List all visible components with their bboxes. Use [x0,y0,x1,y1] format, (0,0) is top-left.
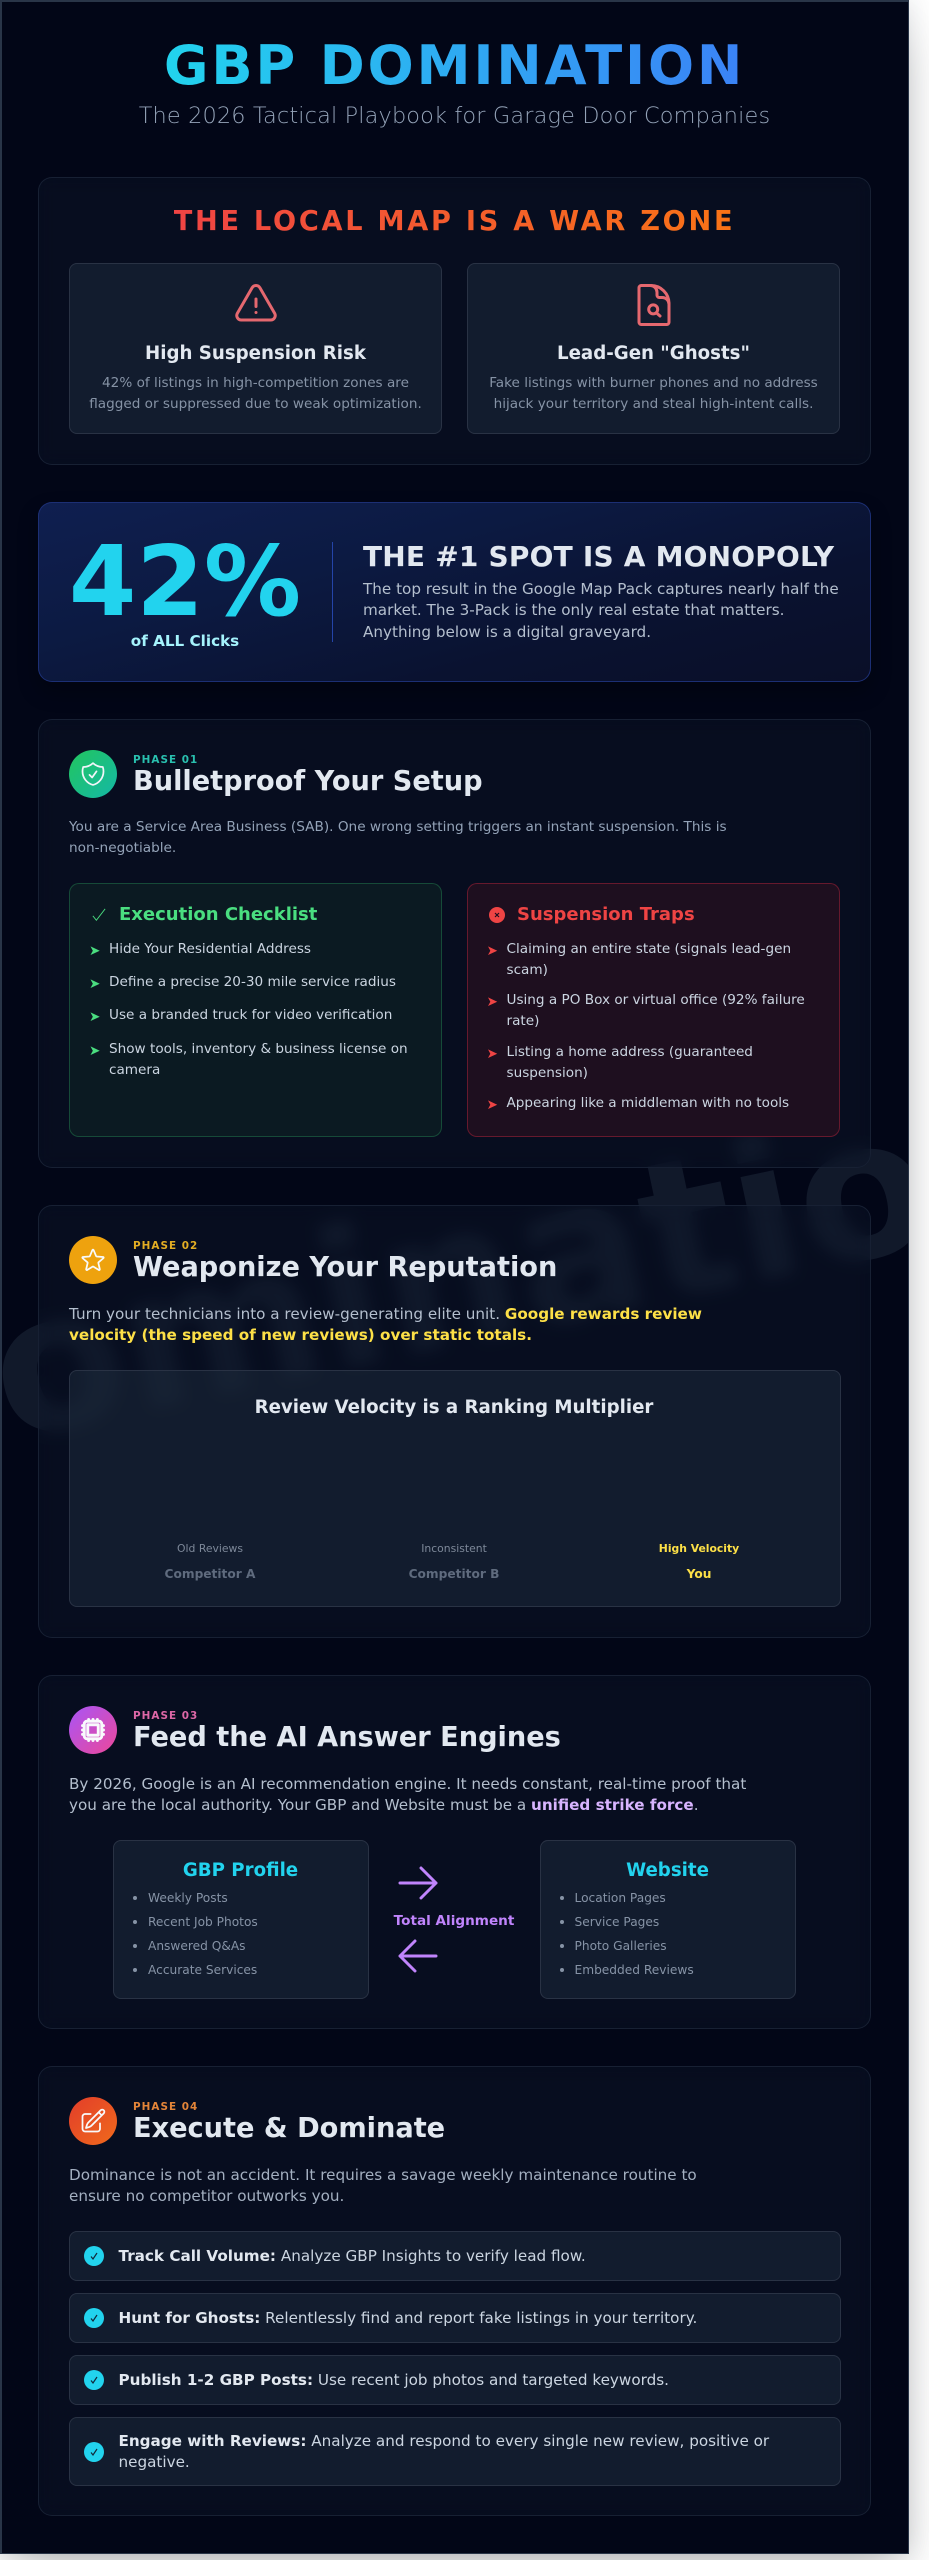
card text: flagged or suppressed due to weak optimization. [89,396,422,412]
task text: Track Call Volume: Analyze GBP Insights to verify lead flow. [118,2247,586,2265]
trap item: Listing a home address (guaranteed [506,1044,753,1060]
checklist item [89,1041,408,1078]
trap item: scam) [506,962,548,978]
chart label: competitor b: Inconsistent [421,1542,487,1555]
trap item [486,1044,753,1081]
monopoly text [362,580,839,641]
chart label: you [659,1542,739,1581]
arrow: right [398,1866,438,1900]
box: gbp profile [113,1840,369,1999]
icon: document search [638,284,670,326]
phase text [69,819,727,856]
task text: Hunt for Ghosts: Relentlessly find and report fake listings in your territory. [118,2309,697,2327]
phase title: Feed the AI Answer Engines [133,1722,561,1753]
icon: check circle [84,2370,104,2390]
panel: phase 03 [38,1675,871,2029]
header [139,34,770,129]
chart label: competitor b: Competitor B [409,1567,499,1581]
phase text: velocity (the speed of new reviews) over static totals. [69,1326,532,1344]
phase text: Dominance is not an accident. It requires a savage weekly maintenance routine to [69,2166,697,2184]
phase text: You are a Service Area Business (SAB). One wrong setting triggers an instant suspension. This is [69,819,727,835]
card: suspension traps: ➤ [486,1046,498,1062]
card text: Fake listings with burner phones and no address [489,375,818,391]
chart label: competitor a: Old Reviews [177,1542,243,1555]
phase label: PHASE 01 [133,754,198,766]
card: execution checklist [69,883,442,1137]
list item: Photo Galleries [574,1939,667,1953]
card: execution checklist: ➤ [89,943,100,959]
task: track call volume [69,2231,841,2281]
checklist item: Show tools, inventory & business license on [109,1041,408,1057]
monopoly text: Anything below is a digital graveyard. [363,623,651,641]
icon: check circle [84,2308,104,2328]
chart label: you: High Velocity [659,1542,739,1555]
icon: pencil square [69,2097,117,2145]
icon: warning triangle [235,284,277,322]
list item: Embedded Reviews [574,1963,694,1977]
icon: star [69,1236,117,1284]
list item: Weekly Posts [148,1891,228,1905]
trap item [486,992,805,1029]
stat: 42%: 42% [69,525,301,638]
phase text: you are the local authority. Your GBP and Website must be a unified strike force. [69,1796,699,1814]
monopoly text: market. The 3-Pack is the only real estate that matters. [363,601,784,619]
chart label: competitor a: Competitor A [165,1567,255,1581]
stat label: of ALL Clicks [131,632,239,650]
card text [89,375,422,412]
card: high suspension risk [69,263,442,434]
task text: Publish 1-2 GBP Posts: Use recent job photos and targeted keywords. [118,2371,669,2389]
title: GBP DOMINATION [164,34,745,97]
phase text [69,1775,746,1814]
trap item: Using a PO Box or virtual office (92% failure [506,992,805,1008]
card text: 42% of listings in high-competition zones are [102,375,409,391]
card: suspension traps: ➤ [486,943,498,959]
task: engage with reviews [69,2417,841,2486]
checklist item: Use a branded truck for video verification [109,1007,392,1023]
trap item: rate) [506,1013,539,1029]
task text: negative. [118,2453,190,2471]
card: execution checklist: ➤ [89,976,100,992]
monopoly text: The top result in the Google Map Pack captures nearly half the [363,580,839,598]
icon: x circle [489,907,505,923]
card title: High Suspension Risk [145,343,366,364]
arrow: left [398,1939,438,1973]
card: lead-gen ghosts [467,263,840,434]
list item: Accurate Services [148,1963,257,1977]
panel: phase 01 [38,719,871,1168]
trap item [486,941,791,978]
list item: Answered Q&As [148,1939,246,1953]
phase text [68,1305,702,1344]
heading: war zone: THE LOCAL MAP IS A WAR ZONE [174,206,735,237]
phase label: PHASE 02 [133,1240,198,1252]
phase text: By 2026, Google is an AI recommendation engine. It needs constant, real-time proof that [69,1775,746,1793]
card text: hijack your territory and steal high-intent calls. [494,396,813,412]
card: execution checklist: ➤ [89,1009,100,1025]
checklist item: Define a precise 20-30 mile service radius [109,974,396,990]
box: website [540,1840,796,1999]
trap item: Appearing like a middleman with no tools [506,1095,789,1111]
phase title: Weaponize Your Reputation [133,1252,557,1283]
chart: review velocity [69,1370,841,1607]
icon: check circle [84,2442,104,2462]
list item: Recent Job Photos [148,1915,258,1929]
icon: cpu chip [69,1706,117,1754]
phase text: Turn your technicians into a review-generating elite unit. Google rewards review [69,1305,702,1323]
list item: Service Pages [574,1915,659,1929]
panel: 42 percent stat [38,502,871,682]
phase text: non-negotiable. [69,840,176,856]
traps title: Suspension Traps [517,904,695,925]
card: suspension traps: ➤ [486,994,498,1010]
chart label: competitor a [165,1542,256,1581]
label: total alignment: Total Alignment [394,1913,514,1929]
card title: Lead-Gen "Ghosts" [557,343,750,364]
panel: phase 02 [38,1205,871,1638]
card: suspension traps [467,883,840,1137]
subtitle: The 2026 Tactical Playbook for Garage Door Companies [139,103,770,129]
phase title: Execute & Dominate [133,2113,445,2144]
chart label: competitor b [409,1542,499,1581]
card text [489,375,818,412]
divider [332,542,333,642]
panel: the local map is a war zone [38,177,871,465]
phase text [69,2166,697,2205]
task text: Engage with Reviews: Analyze and respond to every single new review, positive or [118,2432,769,2450]
heading: monopoly: THE #1 SPOT IS A MONOPOLY [363,540,834,573]
trap item: Claiming an entire state (signals lead-gen [506,941,791,957]
checklist item: camera [109,1062,160,1078]
checklist item: Hide Your Residential Address [109,941,311,957]
card: execution checklist: ➤ [89,1043,100,1059]
phase label: PHASE 03 [133,1710,198,1722]
icon: check [92,908,106,921]
task: hunt for ghosts [69,2293,841,2343]
chart title: Review Velocity is a Ranking Multiplier [255,1397,653,1418]
phase text: ensure no competitor outworks you. [69,2187,344,2205]
icon: shield check [69,750,117,798]
box title: GBP Profile [183,1860,298,1881]
icon: check circle [84,2246,104,2266]
phase label: PHASE 04 [133,2101,198,2113]
panel: phase 04 [38,2066,871,2516]
task text [118,2431,769,2474]
checklist title: Execution Checklist [119,904,317,925]
card: suspension traps: ➤ [486,1097,498,1113]
chart label: you: You [687,1567,711,1581]
task: publish posts [69,2355,841,2405]
trap item: suspension) [506,1065,588,1081]
phase title: Bulletproof Your Setup [133,766,483,797]
list item: Location Pages [574,1891,666,1905]
box title: Website [626,1860,709,1881]
